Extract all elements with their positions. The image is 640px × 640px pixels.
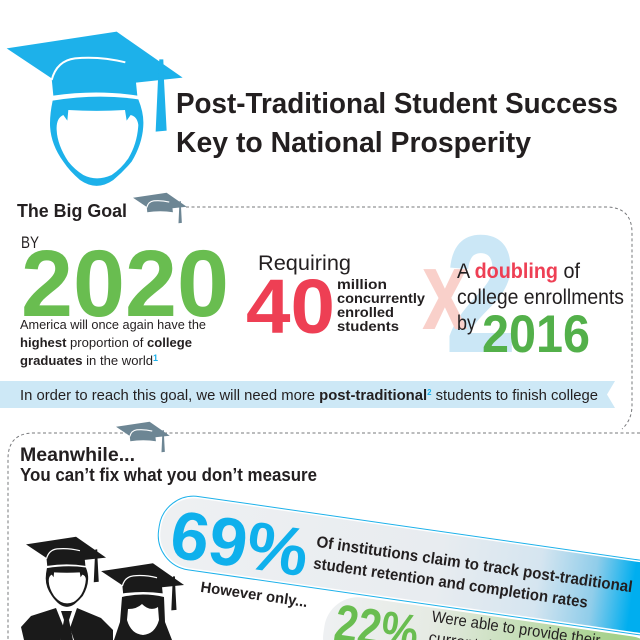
panel: 22% stat (319, 593, 640, 640)
text: requiring 40 million: 40 (246, 264, 335, 350)
heading: meanwhile: You can’t fix what you don’t measure (20, 465, 317, 485)
icon: grey cap (133, 193, 187, 223)
text: doubling by 2016: 2016 (482, 305, 590, 364)
text: by 2020: America will once again have the (20, 317, 206, 332)
icon: male graduate (21, 537, 113, 640)
heading: the big goal: The Big Goal (17, 201, 127, 221)
dashed outline: meanwhile section (8, 433, 640, 640)
graphic: x2: 2 (445, 200, 517, 388)
text: by 2020: 1 (153, 353, 158, 363)
text: doubling by 2016 (457, 260, 624, 364)
text: requiring 40 million: million (337, 276, 387, 292)
text: by 2020: 2020 (21, 231, 229, 337)
banner: students to finish college (431, 387, 598, 404)
icon: graduate head with cap (7, 32, 183, 186)
icon: female graduate (101, 563, 184, 640)
title: Key to National Prosperity (176, 127, 531, 159)
banner: 2 (427, 388, 432, 397)
banner (0, 381, 615, 408)
text: doubling by 2016: by (457, 312, 476, 335)
text: doubling by 2016: college enrollments (457, 286, 624, 309)
text: requiring 40 million (246, 252, 425, 350)
text: however only: However only... (199, 579, 309, 611)
text: by 2020: BY (21, 233, 39, 252)
graphic: x2 (422, 200, 517, 388)
text: doubling by 2016: A doubling of (457, 260, 580, 283)
text: by 2020: highest proportion of college (20, 335, 192, 350)
text: by 2020: graduates in the world (20, 353, 153, 368)
title (176, 88, 618, 159)
icon: grey cap (116, 422, 170, 452)
number: 69%: 69% (166, 496, 313, 591)
panel: 69% stat (153, 492, 640, 640)
heading: meanwhile (20, 445, 317, 485)
title: Post-Traditional Student Success (176, 88, 618, 120)
text: requiring 40 million: concurrently (337, 290, 425, 306)
text: 69% description: student retention and completion rates (312, 555, 589, 612)
text: requiring 40 million: enrolled (337, 304, 394, 320)
banner: In order to reach this goal, we will need more post-traditional (20, 387, 428, 404)
text: requiring 40 million: students (337, 318, 399, 334)
dashed outline: the big goal section (186, 207, 632, 429)
graphic: x2: x (422, 227, 468, 353)
text: requiring 40 million: Requiring (258, 252, 351, 275)
heading: meanwhile: Meanwhile... (20, 445, 135, 466)
